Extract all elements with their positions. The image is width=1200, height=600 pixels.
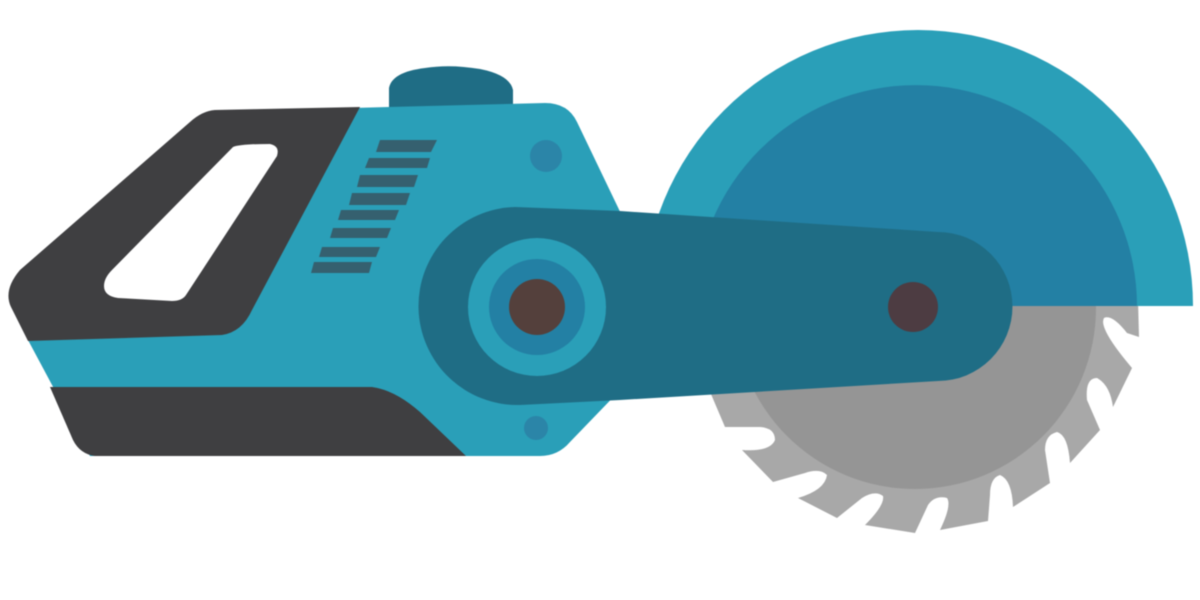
blade inner disc bbox=[734, 127, 1096, 489]
blade teeth bbox=[705, 300, 1139, 533]
lower screw bbox=[524, 416, 548, 440]
blade guard bbox=[643, 30, 1193, 306]
hub outer ring bbox=[468, 238, 606, 376]
upper screw bbox=[530, 140, 562, 172]
motor body bbox=[28, 103, 625, 456]
knob bbox=[389, 66, 513, 108]
main hub bbox=[468, 238, 606, 376]
guard inner panel bbox=[695, 85, 1137, 306]
hub inner ring bbox=[489, 259, 585, 355]
blade pivot bolt bbox=[888, 282, 938, 332]
guard outer shell bbox=[643, 30, 1193, 306]
hub centre bolt bbox=[509, 279, 565, 335]
saw blade bbox=[705, 127, 1139, 533]
arm bbox=[419, 207, 1012, 405]
battery pack bbox=[50, 387, 466, 456]
vent slots bbox=[311, 140, 437, 273]
rear handle bbox=[8, 107, 360, 341]
